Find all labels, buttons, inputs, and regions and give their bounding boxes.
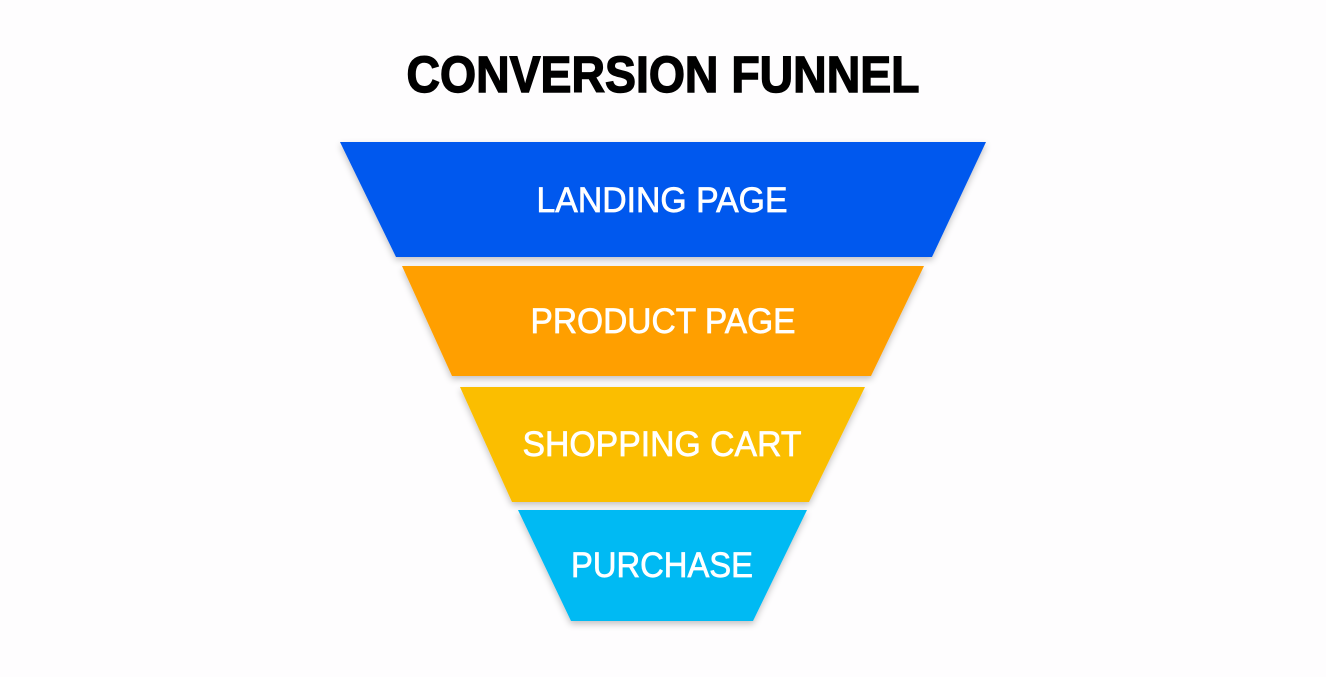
- funnel stage: product page: PRODUCT PAGE: [530, 302, 796, 341]
- title: CONVERSION FUNNEL: [406, 46, 920, 103]
- funnel stage: purchase: PURCHASE: [571, 546, 753, 585]
- funnel stage: shopping cart: [460, 387, 865, 502]
- funnel stage: landing page: [340, 142, 986, 257]
- funnel stage: landing page: LANDING PAGE: [536, 181, 788, 220]
- funnel: [340, 142, 986, 621]
- funnel stage: shopping cart: SHOPPING CART: [522, 425, 802, 464]
- funnel stage: purchase: [518, 510, 807, 621]
- funnel stage: product page: [402, 266, 924, 376]
